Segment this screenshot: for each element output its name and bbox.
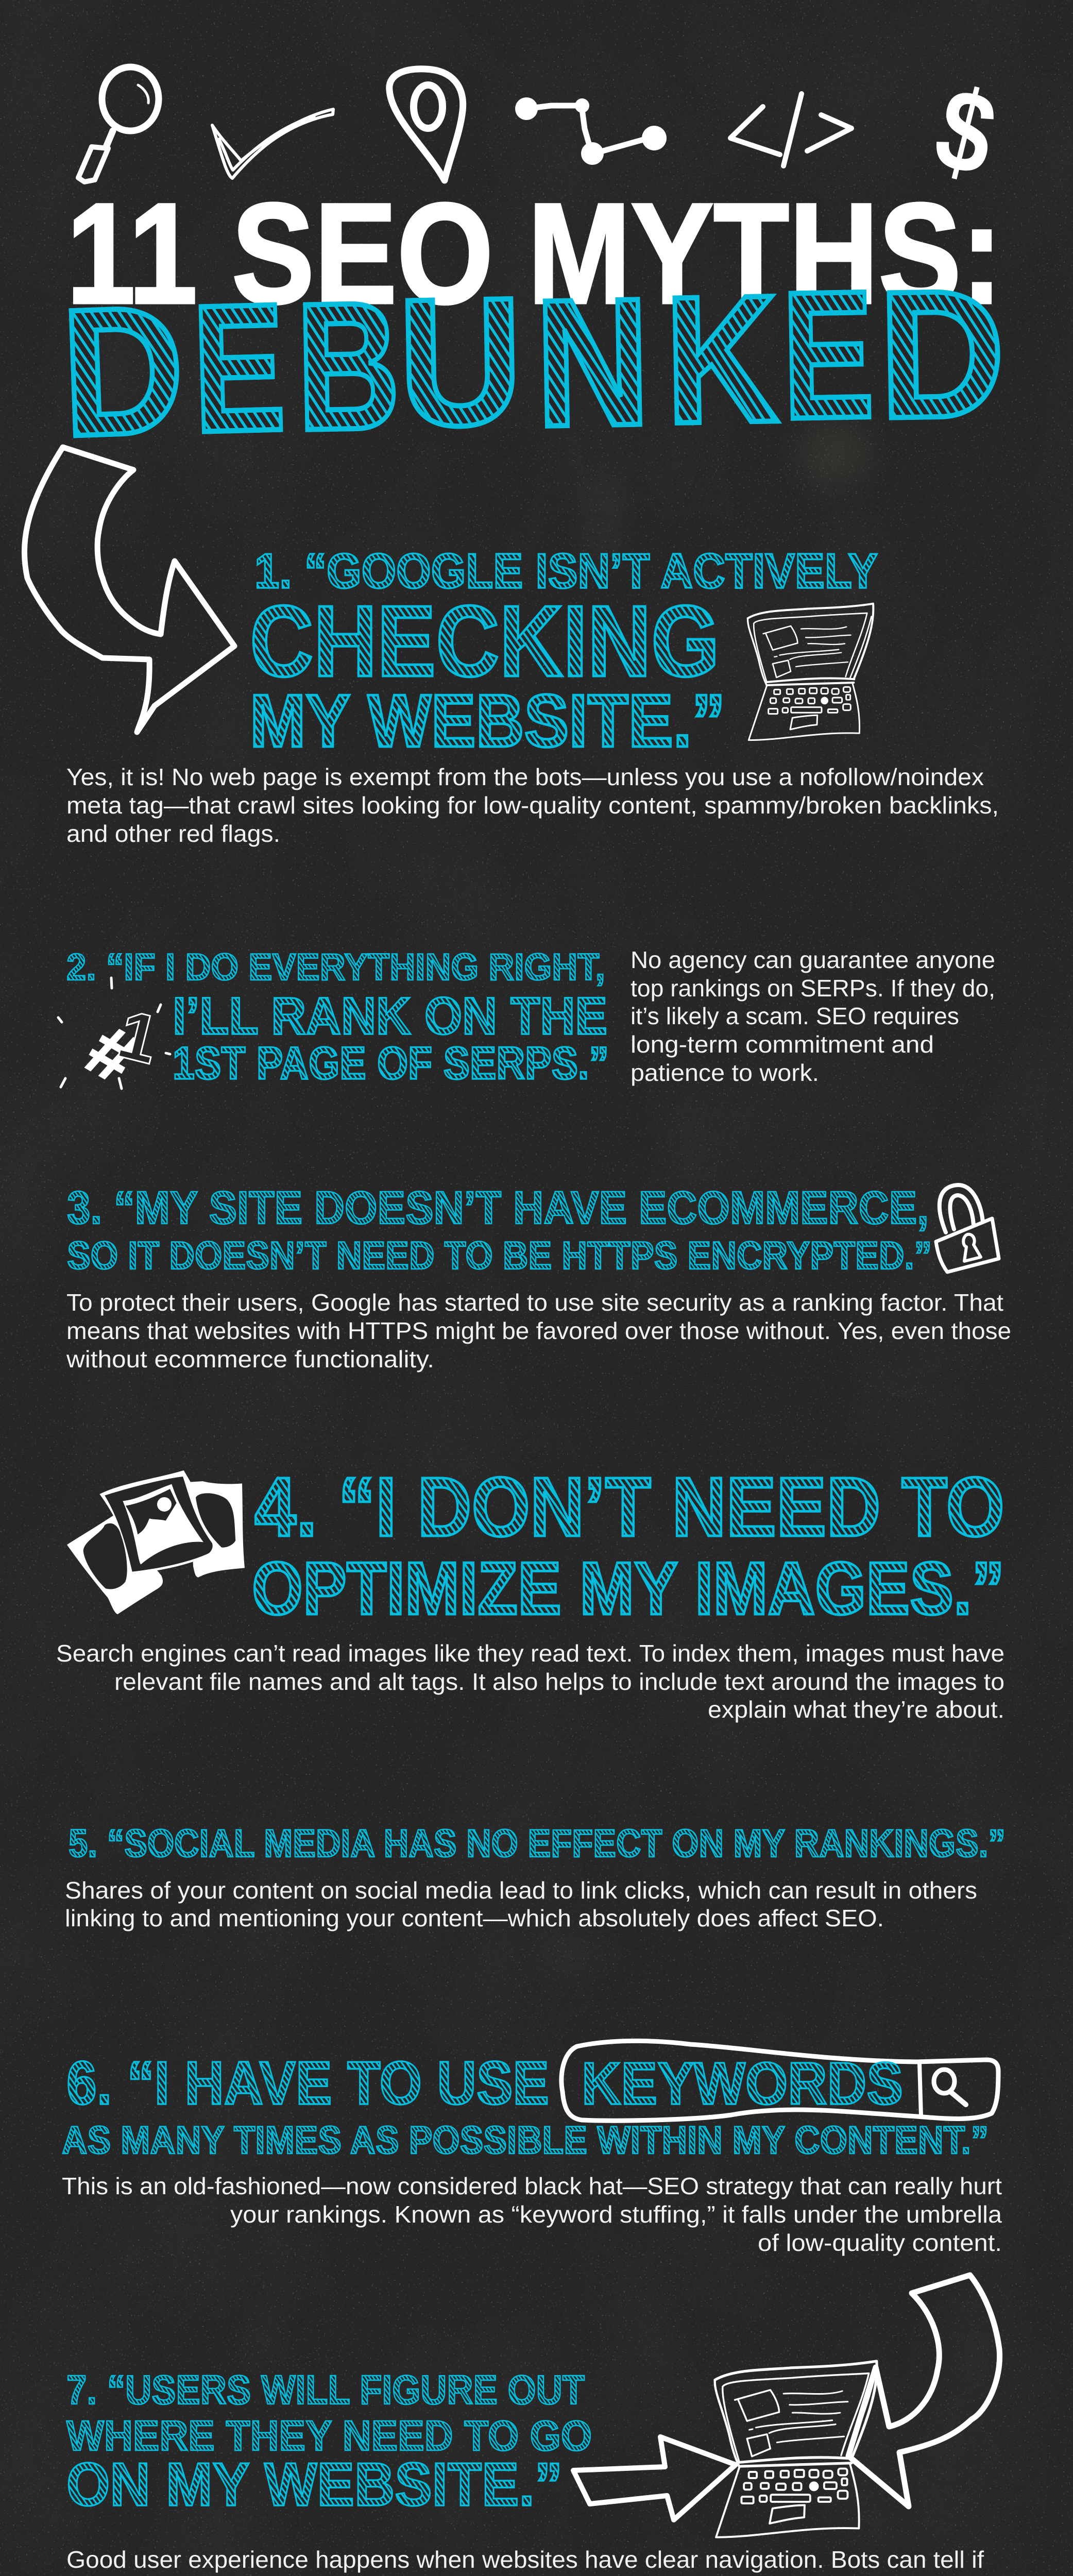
heading: ON MY WEBSITE.” xyxy=(66,2450,563,2519)
body text: patience to work. xyxy=(631,1059,819,1086)
body text xyxy=(631,946,995,1086)
heading: AS MANY TIMES AS POSSIBLE WITHIN MY CONTENT.” xyxy=(62,2119,989,2162)
body text: and other red flags. xyxy=(66,820,280,847)
icon: dollar sign: $ xyxy=(924,62,1008,201)
heading xyxy=(62,2049,989,2162)
heading: I’LL RANK ON THE xyxy=(173,987,607,1045)
panel: myth 2 xyxy=(58,946,995,1099)
icon: code brackets xyxy=(730,94,851,166)
title line: DEBUNKED: E xyxy=(780,252,875,457)
title line: DEBUNKED: K xyxy=(663,257,779,462)
body text xyxy=(56,1640,1004,1723)
body text: No agency can guarantee anyone xyxy=(631,946,995,973)
title line: DEBUNKED: D xyxy=(877,251,1007,456)
body text: Shares of your content on social media lead to link clicks, which can result in others xyxy=(65,1877,977,1904)
title line: DEBUNKED: N xyxy=(534,260,651,465)
panel: myth 7 xyxy=(66,2275,1000,2576)
heading: 2. “IF I DO EVERYTHING RIGHT, xyxy=(66,946,605,988)
heading xyxy=(250,544,878,762)
icon: linked nodes xyxy=(515,97,667,165)
body text: This is an old-fashioned—now considered black hat—SEO strategy that can really hurt xyxy=(62,2173,1002,2199)
panel: myth 4 xyxy=(56,1460,1004,1723)
heading xyxy=(66,946,609,1089)
title line: DEBUNKED: D xyxy=(59,267,187,474)
icon: laptop xyxy=(715,2361,877,2537)
title line: DEBUNKED: E xyxy=(191,265,287,470)
body text: explain what they’re about. xyxy=(708,1696,1004,1723)
search box with keywords: KEYWORDS xyxy=(582,2050,903,2117)
panel: myth 6 xyxy=(62,2041,1002,2256)
body text: Search engines can’t read images like they read text. To index them, images must have xyxy=(56,1640,1004,1667)
title line: DEBUNKED: U xyxy=(397,259,524,464)
panel: myth 1 xyxy=(24,447,999,847)
title line: DEBUNKED: B xyxy=(295,264,401,468)
search box with keywords xyxy=(561,2041,998,2121)
body text: relevant file names and alt tags. It also helps to include text around the images to xyxy=(114,1668,1004,1695)
heading: SO IT DOESN’T NEED TO BE HTTPS ENCRYPTED.” xyxy=(67,1234,932,1278)
panel: myth 3 xyxy=(66,1182,1011,1372)
body text: without ecommerce functionality. xyxy=(66,1346,434,1372)
arrow: curved arrow pointing right xyxy=(24,447,234,732)
body text: linking to and mentioning your content—which absolutely does affect SEO. xyxy=(65,1905,884,1931)
title line: DEBUNKED: E xyxy=(191,265,287,470)
title line: DEBUNKED: K xyxy=(663,257,779,462)
body text: means that websites with HTTPS might be favored over those without. Yes, even those xyxy=(66,1317,1011,1344)
heading: MY WEBSITE.” xyxy=(250,679,725,762)
title line: DEBUNKED: N xyxy=(534,260,651,465)
heading: 3. “MY SITE DOESN’T HAVE ECOMMERCE, xyxy=(67,1182,929,1234)
title line: DEBUNKED: B xyxy=(295,264,401,468)
icon: number one badge xyxy=(58,978,170,1099)
icon: photos xyxy=(67,1470,245,1614)
title line: DEBUNKED: E xyxy=(780,252,875,457)
title xyxy=(59,173,1007,474)
icon: search xyxy=(934,2070,966,2105)
title line: DEBUNKED: U xyxy=(397,259,524,464)
body text: Good user experience happens when websites have clear navigation. Bots can tell if xyxy=(66,2546,984,2573)
icon: padlock xyxy=(936,1185,999,1272)
body text: your rankings. Known as “keyword stuffing,” it falls under the umbrella xyxy=(230,2201,1002,2228)
heading: 4. “I DON’T NEED TO xyxy=(254,1460,1004,1554)
icon: check mark xyxy=(212,109,333,178)
icon: location pin xyxy=(389,69,463,180)
body text: To protect their users, Google has started to use site security as a ranking factor. That xyxy=(66,1289,1003,1316)
body text xyxy=(66,764,999,847)
body text: Yes, it is! No web page is exempt from the bots—unless you use a nofollow/noindex xyxy=(66,764,984,790)
icon: number one badge: 1 xyxy=(111,996,166,1078)
icon: magnifier xyxy=(78,67,159,182)
title line: DEBUNKED: D xyxy=(877,251,1007,456)
heading xyxy=(252,1460,1004,1630)
body text: top rankings on SERPs. If they do, xyxy=(631,975,995,1002)
body text xyxy=(65,1877,977,1931)
icon: laptop xyxy=(748,604,873,740)
arrow: curved arrow pointing to laptop xyxy=(848,2275,1000,2506)
body text: long-term commitment and xyxy=(631,1031,934,1058)
heading: 1ST PAGE OF SERPS.” xyxy=(173,1037,609,1089)
icon: number one badge: # xyxy=(75,1009,150,1099)
heading: 1. “GOOGLE ISN’T ACTIVELY xyxy=(254,544,878,599)
heading: 6. “I HAVE TO USE xyxy=(66,2049,549,2117)
body text: meta tag—that crawl sites looking for low-quality content, spammy/broken backlinks, xyxy=(66,792,999,819)
title line: DEBUNKED: D xyxy=(59,267,187,474)
title line: DEBUNKED xyxy=(59,251,1007,474)
header icons xyxy=(78,62,1008,201)
heading xyxy=(67,1182,932,1278)
body text: it’s likely a scam. SEO requires xyxy=(631,1003,959,1029)
arrow: straight arrow pointing to laptop xyxy=(573,2437,736,2520)
heading xyxy=(66,2367,592,2519)
body text xyxy=(62,2173,1002,2256)
body text xyxy=(66,1289,1011,1372)
heading: 7. “USERS WILL FIGURE OUT xyxy=(66,2367,585,2413)
heading: WHERE THEY NEED TO GO xyxy=(66,2412,592,2460)
body text: of low-quality content. xyxy=(758,2229,1002,2256)
panel: myth 5 xyxy=(65,1822,1006,1931)
heading: CHECKING xyxy=(250,585,720,698)
